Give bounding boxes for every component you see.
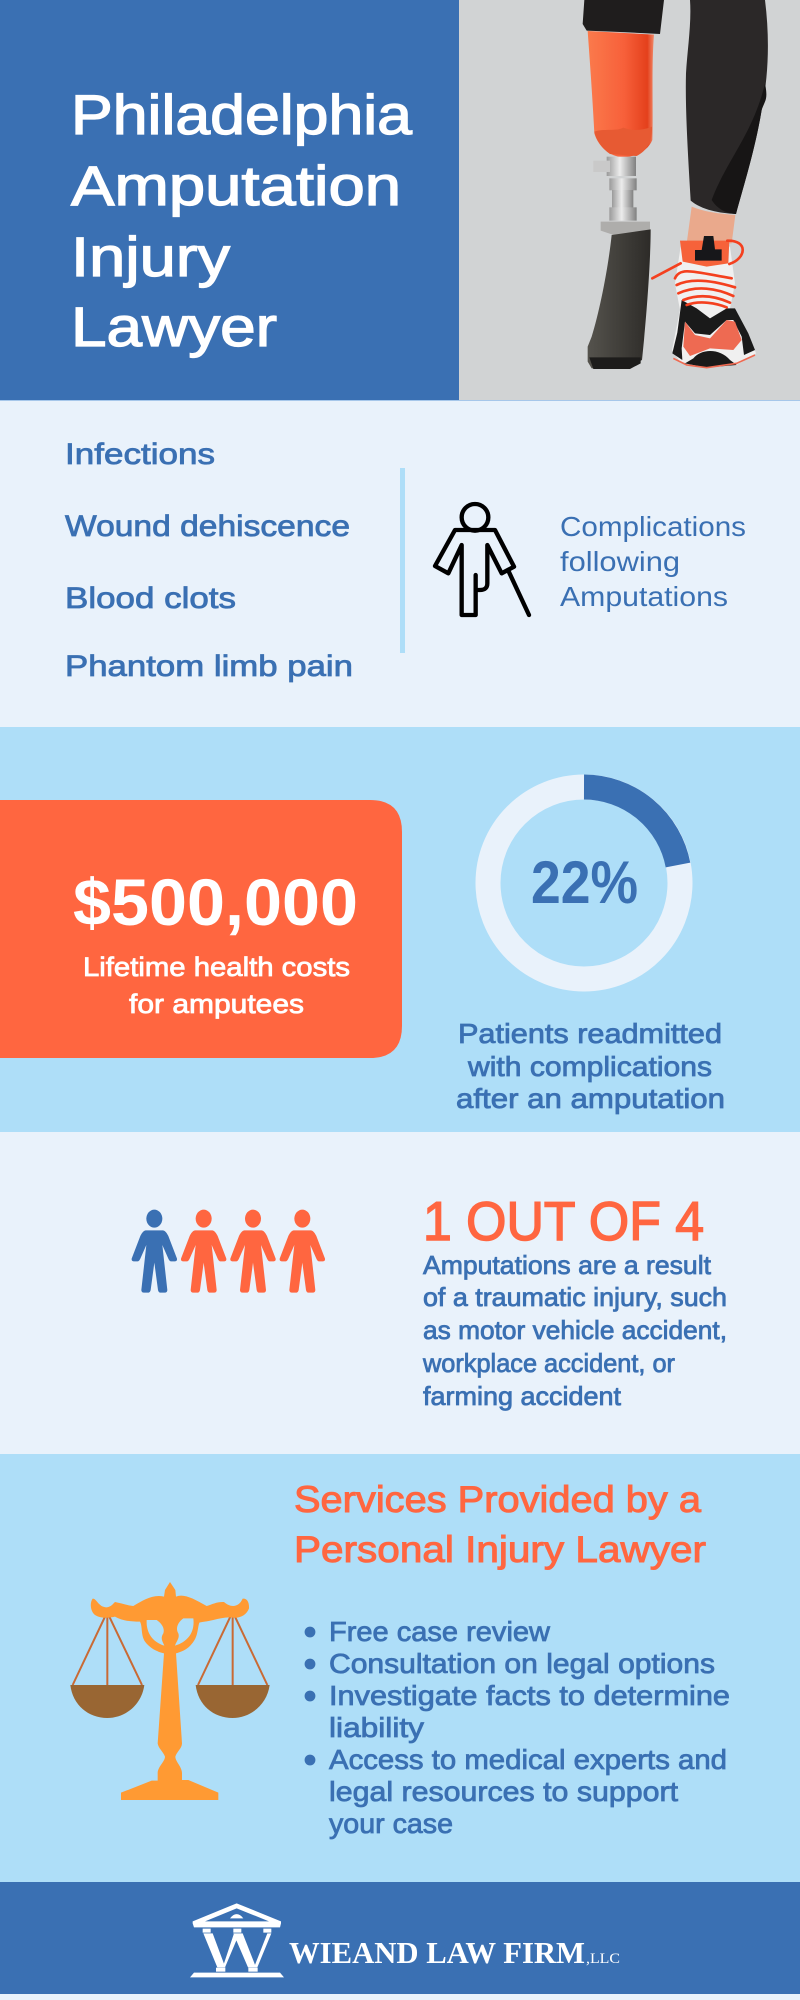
heading: services: Services Provided by a: [294, 1479, 701, 1520]
panel: services: [0, 1454, 800, 1882]
callout: lifetime health costs: for amputees: [129, 989, 304, 1019]
heading: services: [294, 1479, 706, 1570]
panel: one out of four: [0, 1132, 800, 1454]
list of services: [305, 1616, 730, 1839]
title: Amputation: [71, 154, 401, 217]
list of complications: Blood clots: [65, 582, 236, 615]
statistic description: of a traumatic injury, such: [423, 1282, 727, 1312]
statistic description: Amputations are a result: [423, 1250, 712, 1280]
title: Philadelphia: [71, 83, 413, 146]
caption: patients readmitted: [456, 1018, 725, 1114]
list of complications: [65, 438, 353, 683]
list of services: Free case review: [329, 1616, 551, 1647]
callout: lifetime health costs: [0, 800, 402, 1058]
photo: prosthetic leg and sneaker: [459, 0, 800, 400]
panel: complications: [0, 400, 800, 727]
statistic description: workplace accident, or: [422, 1348, 675, 1378]
donut chart: 22%: [488, 787, 680, 979]
list of complications: Phantom limb pain: [65, 650, 353, 683]
list of complications: Wound dehiscence: [65, 510, 350, 543]
caption: patients readmitted: with complications: [467, 1051, 712, 1082]
statistic heading: 1 OUT OF 4: [423, 1190, 704, 1252]
caption: complications following amputations: [560, 511, 746, 612]
caption: complications following amputations: Complications: [560, 511, 746, 542]
list of services: liability: [329, 1712, 424, 1743]
statistic description: farming accident: [423, 1381, 622, 1411]
title: [71, 83, 413, 358]
caption: patients readmitted: Patients readmitted: [458, 1018, 722, 1049]
icon: courthouse logo: [190, 1903, 284, 1977]
callout: lifetime health costs: Lifetime health costs: [83, 952, 350, 982]
statistic description: as motor vehicle accident,: [423, 1315, 727, 1345]
caption: complications following amputations: Amputations: [560, 581, 728, 612]
title: Injury: [71, 225, 230, 288]
icon: amputee with crutch: [435, 504, 529, 615]
list of services: Access to medical experts and: [329, 1744, 727, 1775]
footer: law firm logo: [0, 1882, 800, 1994]
icon: scales of justice: [70, 1582, 270, 1800]
title: Lawyer: [71, 295, 277, 358]
icon: four people: [132, 1210, 325, 1293]
caption: patients readmitted: after an amputation: [456, 1083, 725, 1114]
firm name: ,LLC: [586, 1951, 620, 1967]
statistic description: [422, 1250, 727, 1411]
heading: services: Personal Injury Lawyer: [294, 1529, 706, 1570]
panel: statistics: [0, 727, 800, 1132]
panel: header: [0, 0, 459, 400]
firm name: WIEAND LAW FIRM: [289, 1935, 585, 1970]
donut chart: 22%: 22%: [531, 849, 638, 916]
list of services: Consultation on legal options: [329, 1648, 715, 1679]
list of services: Investigate facts to determine: [329, 1680, 730, 1711]
list of services: your case: [329, 1808, 453, 1839]
callout: lifetime health costs: $500,000: [73, 865, 358, 939]
list of complications: Infections: [65, 438, 215, 471]
caption: complications following amputations: following: [560, 546, 680, 577]
list of services: legal resources to support: [329, 1776, 678, 1807]
